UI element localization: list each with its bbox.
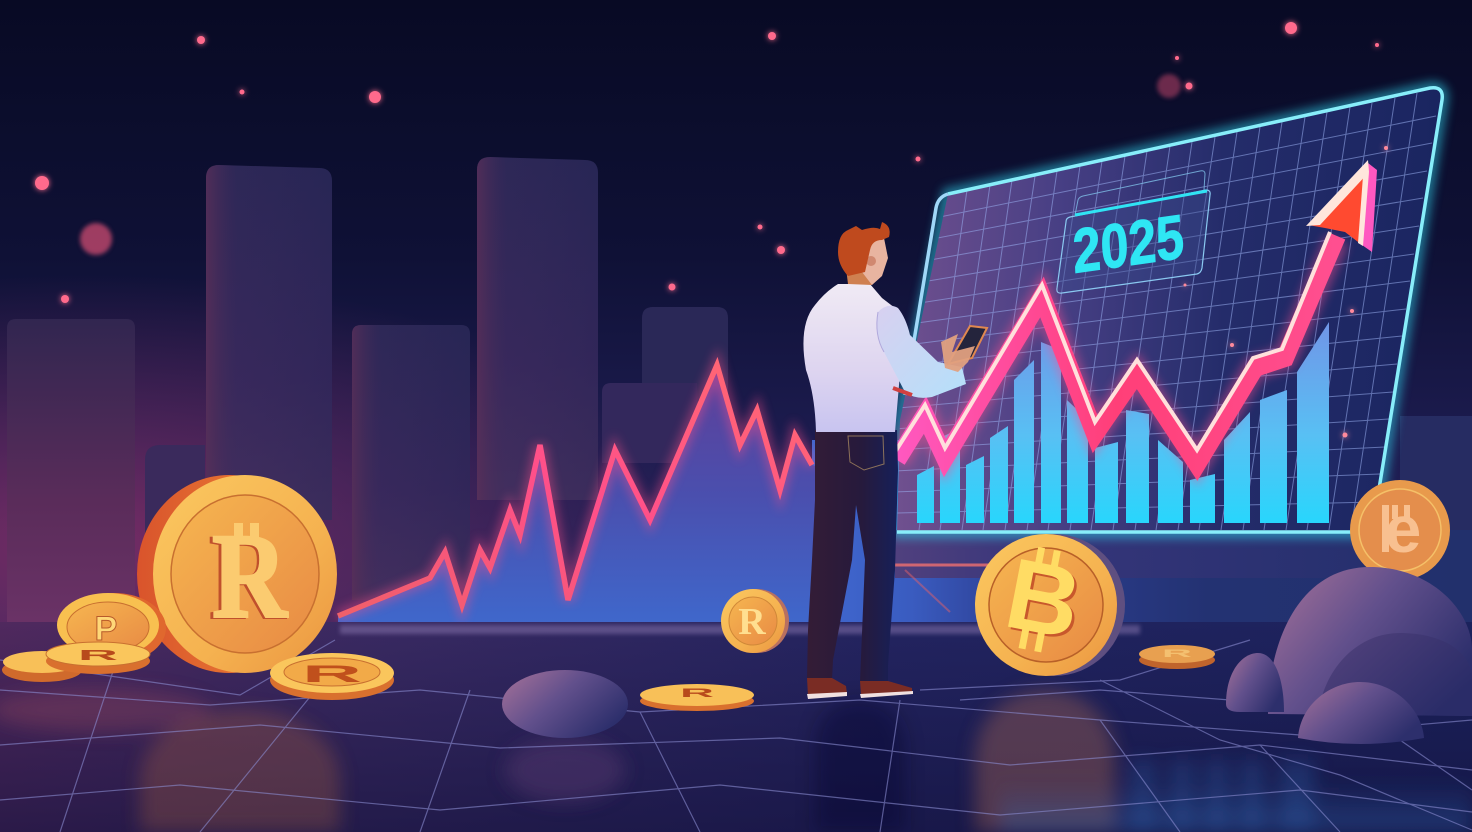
- small R coin: R: [738, 601, 766, 643]
- floor: [0, 622, 1472, 832]
- flat coin center left: [270, 653, 394, 700]
- flat coin center: [640, 684, 754, 711]
- person: pocket stitching: [848, 436, 884, 470]
- flat coin center left: R: [302, 661, 362, 688]
- 2025 label: [1057, 171, 1210, 293]
- floor reflections: [0, 688, 1472, 832]
- screen stand: [895, 530, 1375, 612]
- small screen sparks: [1184, 146, 1388, 438]
- glowing particles: [35, 22, 1379, 558]
- dome: small left: [1226, 653, 1284, 712]
- floor grid lines: [0, 640, 1472, 832]
- large bitcoin coin: B: [997, 537, 1090, 661]
- dome: inner shadow arc: [1318, 633, 1472, 716]
- mountain chart line: [338, 365, 812, 616]
- large bitcoin coin: [975, 534, 1125, 676]
- large R coin: R: [209, 510, 287, 645]
- flat coin center: R: [680, 686, 715, 700]
- person: red pen: [893, 388, 912, 395]
- person: shoes: [807, 678, 913, 699]
- screen glow: [897, 88, 1442, 532]
- screen panel: [897, 88, 1442, 532]
- dome: large right: [1268, 567, 1472, 716]
- person: legs: [807, 430, 898, 682]
- screen bar chart: [917, 322, 1329, 523]
- 2025 label: 2025: [1071, 202, 1186, 287]
- blurred particles: [24, 74, 1181, 453]
- person: hand: [941, 334, 975, 372]
- flat coin right: [1139, 645, 1215, 669]
- person: hair: [838, 222, 890, 276]
- flat coin right: R: [1162, 648, 1192, 660]
- coin pile left: P: [95, 610, 117, 648]
- rising trend arrow: [895, 160, 1377, 464]
- person: shirt body: [803, 284, 902, 432]
- background buildings: [7, 157, 1472, 626]
- person: sleeve: [877, 306, 966, 398]
- top right coin: e: [1385, 492, 1421, 566]
- coin pile left: [2, 593, 166, 682]
- person: neck and head: [846, 268, 874, 285]
- screen border: [897, 88, 1442, 532]
- dome: front: [1298, 682, 1424, 744]
- large R coin: [137, 475, 337, 673]
- mountain chart area: [338, 365, 830, 626]
- person with phone: [803, 222, 987, 699]
- back wall behind the screen: [812, 440, 1472, 626]
- large bitcoin coin: B: [1000, 540, 1092, 663]
- large R coin: R: [212, 509, 289, 644]
- background: [0, 0, 1472, 640]
- top right coin: [1350, 480, 1450, 580]
- chart screen: [895, 88, 1442, 532]
- person: phone: [948, 326, 987, 364]
- dome: center: [502, 670, 628, 738]
- domes: [502, 567, 1472, 744]
- small R coin: [721, 589, 789, 653]
- screen grid: [895, 93, 1436, 530]
- coin pile left: R: [78, 647, 119, 664]
